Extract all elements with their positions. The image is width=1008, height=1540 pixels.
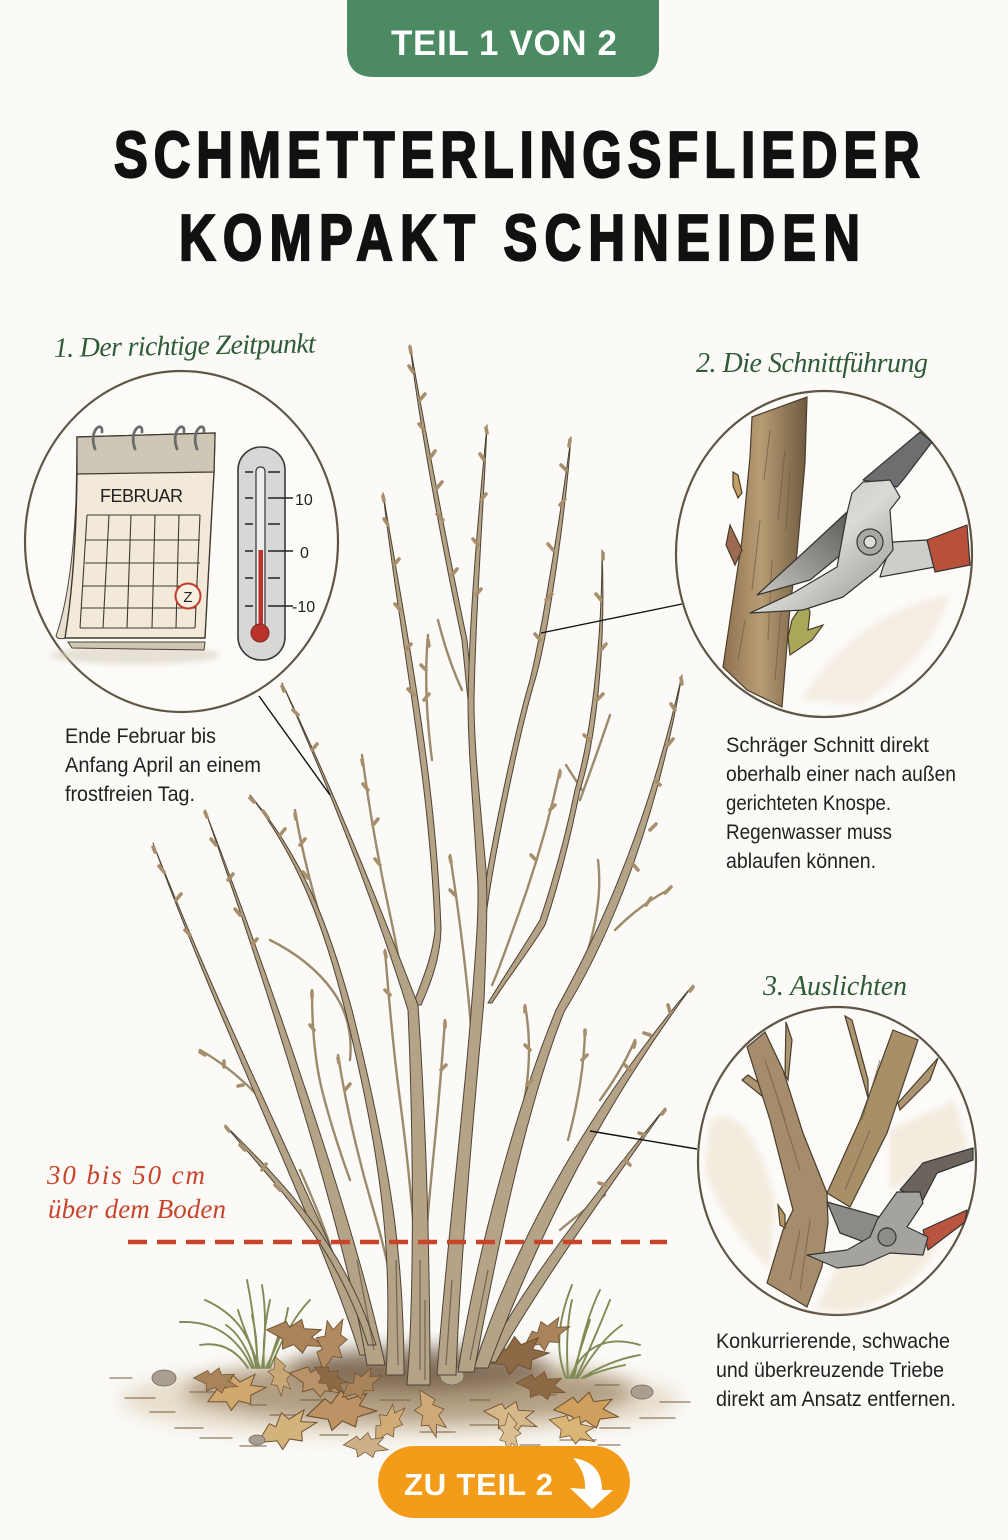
heading 1: 1. Der richtige Zeitpunkt: [54, 328, 317, 364]
icon: bypass secateurs: [750, 432, 970, 613]
stones: [152, 1367, 653, 1445]
text 3: direkt am Ansatz entfernen.: [716, 1388, 956, 1411]
heading 3: 3. Auslichten: [762, 971, 907, 1002]
circle 1: [25, 371, 338, 712]
header badge: TEIL 1 VON 2: [391, 24, 617, 63]
cutting height line: 30 bis 50 cm: [46, 1160, 205, 1190]
icon: thermometer: 0: [300, 545, 309, 562]
leader lines: [259, 604, 697, 1149]
header badge: [347, 0, 659, 77]
crossing branches: [742, 1016, 938, 1307]
icon: calendar: Z: [183, 589, 193, 606]
text 1: Ende Februar bis: [65, 725, 216, 748]
icon: thermometer: 10: [295, 492, 313, 509]
text 2: gerichteten Knospe.: [726, 792, 891, 815]
panel: timing: [25, 328, 338, 806]
cutting height line: [46, 1160, 667, 1242]
text 1: frostfreien Tag.: [65, 783, 195, 806]
text 3: und überkreuzende Triebe: [716, 1359, 944, 1382]
panel: thinning out: [698, 971, 976, 1411]
icon: curved arrow: [570, 1458, 613, 1509]
icon: calendar: [50, 427, 220, 664]
soil texture: [110, 1378, 690, 1446]
base bark shading: [357, 1260, 488, 1380]
icon: anvil secateurs: [807, 1148, 973, 1268]
title: [114, 119, 920, 274]
circle 3: [698, 1007, 976, 1315]
circle 2: [676, 391, 972, 717]
cutting height line: über dem Boden: [48, 1194, 226, 1224]
main stems: [153, 345, 693, 1385]
shrub: [153, 345, 693, 1385]
text 2: oberhalb einer nach außen: [726, 763, 956, 786]
icon: calendar: FEBRUAR: [100, 486, 183, 506]
pencil shading: [800, 595, 950, 705]
title: KOMPAKT SCHNEIDEN: [179, 202, 860, 274]
thin side shoots: [200, 620, 668, 1300]
text 2: ablaufen können.: [726, 850, 876, 873]
text 2: Schräger Schnitt direkt: [726, 734, 929, 757]
button: to part 2: ZU TEIL 2: [404, 1467, 553, 1502]
text 1: Anfang April an einem: [65, 754, 261, 777]
text 2: Regenwasser muss: [726, 821, 892, 844]
button: to part 2: [378, 1446, 630, 1518]
icon: thermometer: -10: [292, 599, 315, 616]
ground with soil, leaves and grass: [110, 1280, 690, 1460]
icon: thermometer: [238, 447, 315, 660]
panel: cutting technique: [676, 348, 972, 873]
heading 2: 2. Die Schnittführung: [696, 348, 928, 379]
grass tufts: [180, 1280, 640, 1378]
title: SCHMETTERLINGSFLIEDER: [114, 119, 920, 191]
buds: [153, 347, 693, 1190]
text 3: Konkurrierende, schwache: [716, 1330, 950, 1353]
brown leaves: [192, 1311, 620, 1460]
pencil shading: [705, 1100, 968, 1312]
branch with buds: [723, 397, 823, 707]
